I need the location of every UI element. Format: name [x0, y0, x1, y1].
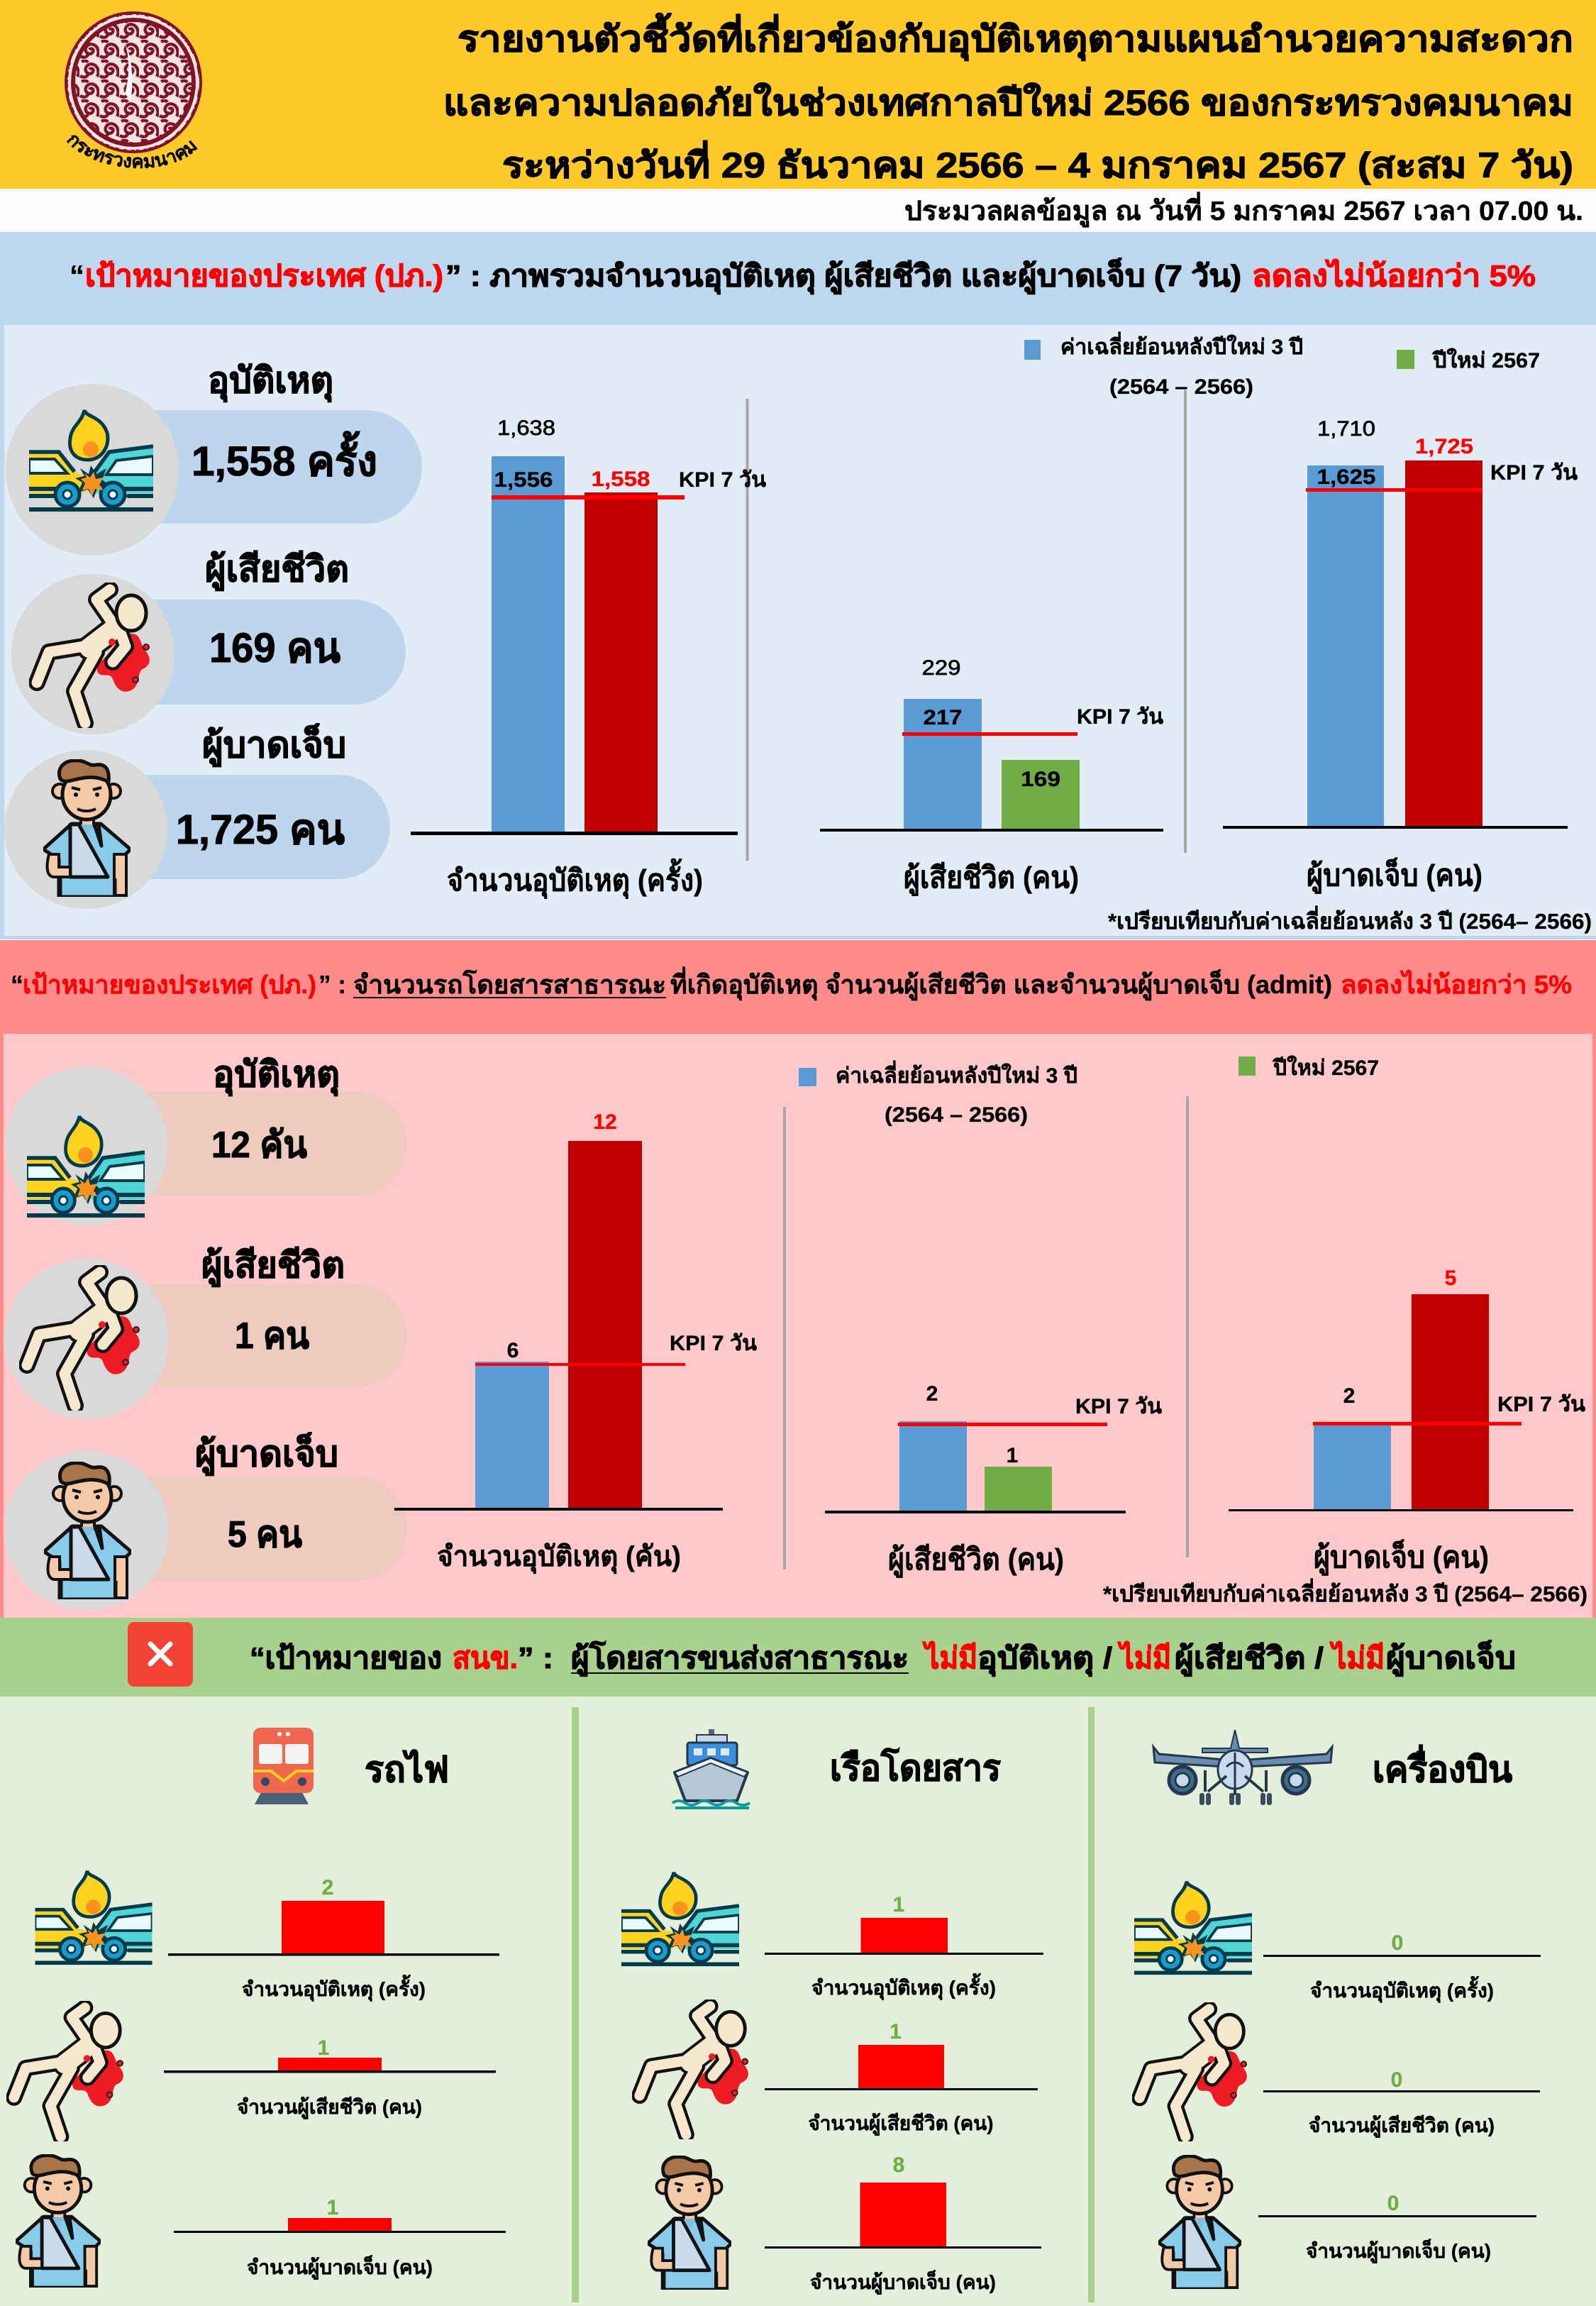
- chart: accident vehicles, section 2: 12: [593, 1110, 617, 1134]
- title: และความปลอดภัยในช่วงเทศกาลปีใหม่ 2566 ของกระทรวงคมนาคม: [443, 82, 1573, 123]
- section 1 heading: “: [70, 259, 84, 292]
- aviation injured row: จำนวนผู้บาดเจ็บ (คน): [1306, 2239, 1491, 2263]
- stat: injured: [4, 723, 390, 909]
- icon: airplane: [1153, 1730, 1332, 1805]
- section 2 heading: เป้าหมายของประเทศ (ปภ.): [23, 970, 316, 999]
- rail accidents row: จำนวนอุบัติเหตุ (ครั้ง): [242, 1974, 426, 2002]
- chart: deaths, section 1: ผู้เสียชีวิต (คน): [904, 861, 1079, 896]
- footnote: section 1: *เปรียบเทียบกับค่าเฉลี่ยย้อนหลัง 3 ปี (2564– 2566): [1108, 905, 1592, 934]
- chart: accidents, section 1: 1,558: [592, 468, 650, 491]
- panel: ferry: เรือโดยสาร: [830, 1747, 1001, 1788]
- aviation deaths row: 0: [1391, 2068, 1402, 2092]
- stat: deaths: ผู้เสียชีวิต: [205, 549, 349, 591]
- stat: accidents: อุบัติเหตุ: [213, 1054, 340, 1096]
- stat: injured: [4, 1432, 407, 1610]
- panel: public transport summary: [4, 1054, 407, 1610]
- icon: train: [253, 1728, 314, 1804]
- chart: accidents, section 1: 1,556: [494, 468, 553, 492]
- chart: injured, section 1: [1223, 417, 1578, 894]
- chart: deaths, section 1: 229: [922, 656, 960, 680]
- legend: section 2: ค่าเฉลี่ยย้อนหลังปีใหม่ 3 ปี: [836, 1060, 1077, 1088]
- section 3 heading: ไม่มี: [1117, 1640, 1171, 1675]
- legend: section 2: [799, 1055, 1379, 1127]
- section 1 heading: เป้าหมายของประเทศ (ปภ.): [85, 259, 443, 292]
- chart: injured, section 1: 1,625: [1317, 465, 1376, 489]
- section 2 heading: ลดลงไม่น้อยกว่า 5%: [1341, 969, 1572, 999]
- ferry accidents row: จำนวนอุบัติเหตุ (ครั้ง): [811, 1973, 996, 2000]
- section 3 heading: [0, 1618, 1596, 1697]
- panel: national overview summary: [4, 360, 422, 909]
- chart: deaths, section 2: 1: [1007, 1444, 1018, 1467]
- chart: injured, section 2: 2: [1343, 1384, 1355, 1408]
- icon: ship: [672, 1729, 750, 1808]
- rail deaths row: [14, 2008, 496, 2136]
- chart: accident vehicles, section 2: 6: [507, 1339, 519, 1362]
- ferry deaths row: [640, 2007, 1038, 2136]
- chart: accident vehicles, section 2: จำนวนอุบัติเหตุ (คัน): [437, 1541, 681, 1574]
- chart: accidents, section 1: KPI 7 วัน: [679, 468, 767, 492]
- chart: injured, section 2: 5: [1445, 1267, 1456, 1290]
- section 2 heading: จำนวนรถโดยสารสาธารณะ: [353, 969, 666, 999]
- chart: deaths, section 2: KPI 7 วัน: [1075, 1395, 1162, 1418]
- chart: accident vehicles, section 2: KPI 7 วัน: [670, 1332, 758, 1355]
- aviation deaths row: จำนวนผู้เสียชีวิต (คน): [1309, 2114, 1495, 2138]
- ferry deaths row: จำนวนผู้เสียชีวิต (คน): [809, 2112, 993, 2136]
- legend: section 1: ค่าเฉลี่ยย้อนหลังปีใหม่ 3 ปี: [1060, 331, 1303, 359]
- chart: deaths, section 2: 2: [926, 1382, 938, 1406]
- stat: injured: ผู้บาดเจ็บ: [202, 723, 346, 767]
- section 3 heading: สนข.: [453, 1641, 518, 1675]
- ferry accidents row: 1: [893, 1893, 904, 1916]
- stat: deaths: 169 คน: [209, 625, 340, 671]
- stat: deaths: [11, 549, 406, 734]
- stat: accidents: 1,558 ครั้ง: [192, 431, 377, 485]
- ferry injured row: 8: [893, 2153, 904, 2177]
- chart: injured, section 2: ผู้บาดเจ็บ (คน): [1314, 1539, 1489, 1576]
- panel: aviation: [1134, 1730, 1541, 2289]
- chart: injured, section 2: KPI 7 วัน: [1497, 1393, 1586, 1416]
- stat: injured: ผู้บาดเจ็บ: [195, 1432, 338, 1476]
- rail accidents row: [35, 1871, 499, 2002]
- chart: accident vehicles, section 2: [394, 1110, 758, 1574]
- panel: rail: [14, 1728, 506, 2288]
- chart: deaths, section 2: ผู้เสียชีวิต (คน): [888, 1543, 1064, 1578]
- ferry accidents row: [621, 1872, 1043, 2000]
- data processed date: ประมวลผลข้อมูล ณ วันที่ 5 มกราคม 2567 เวลา 07.00 น.: [904, 192, 1583, 228]
- aviation accidents row: [1134, 1882, 1541, 2003]
- legend: section 1: [1024, 331, 1540, 399]
- chart: deaths, section 1: 169: [1021, 768, 1060, 791]
- rail injured row: [16, 2156, 506, 2288]
- panel: rail: รถไฟ: [365, 1749, 449, 1789]
- section 1 heading: [0, 232, 1596, 325]
- aviation deaths row: [1139, 2009, 1540, 2138]
- section 2 heading: ที่เกิดอุบัติเหตุ จำนวนผู้เสียชีวิต และจำนวนผู้บาดเจ็บ (admit): [670, 966, 1332, 1001]
- chart: injured, section 1: 1,725: [1415, 435, 1473, 458]
- aviation injured row: 0: [1387, 2192, 1399, 2215]
- logo: ministry of transport seal: กระทรวงคมนาคม: [67, 135, 198, 169]
- chart: deaths, section 2: [825, 1382, 1162, 1578]
- ferry deaths row: 1: [890, 2020, 902, 2043]
- legend: section 1: (2564 – 2566): [1109, 375, 1253, 399]
- stat: deaths: [4, 1245, 407, 1419]
- section 2 heading: ” :: [318, 970, 346, 999]
- stat: accidents: 12 คัน: [211, 1125, 307, 1166]
- rail injured row: จำนวนผู้บาดเจ็บ (คน): [247, 2255, 433, 2280]
- header banner: [0, 0, 1596, 189]
- logo: ministry of transport seal: [65, 11, 202, 169]
- legend: section 2: (2564 – 2566): [885, 1103, 1028, 1127]
- rail deaths row: จำนวนผู้เสียชีวิต (คน): [237, 2096, 422, 2119]
- icon: red cross button: [128, 1622, 193, 1687]
- stat: accidents: [6, 360, 422, 556]
- stat: deaths: ผู้เสียชีวิต: [201, 1245, 345, 1287]
- ferry injured row: [648, 2153, 1041, 2295]
- chart: accidents, section 1: จำนวนอุบัติเหตุ (ครั้ง): [447, 858, 703, 899]
- section 3 heading: “เป้าหมายของ: [250, 1641, 442, 1675]
- chart: deaths, section 1: [820, 656, 1163, 896]
- stat: accidents: [5, 1054, 407, 1226]
- chart: deaths, section 1: KPI 7 วัน: [1077, 705, 1163, 729]
- section 3 heading: อุบัติเหตุ /: [977, 1641, 1112, 1677]
- section 1 heading: ลดลงไม่น้อยกว่า 5%: [1252, 258, 1536, 292]
- panel: ferry: [621, 1729, 1043, 2295]
- ferry injured row: จำนวนผู้บาดเจ็บ (คน): [810, 2270, 996, 2295]
- chart: injured, section 1: ผู้บาดเจ็บ (คน): [1307, 857, 1483, 894]
- section 3 heading: ผู้บาดเจ็บ: [1386, 1640, 1516, 1677]
- stat: injured: 1,725 คน: [176, 807, 345, 853]
- chart: deaths, section 1: 217: [924, 706, 962, 729]
- rail injured row: 1: [327, 2196, 338, 2219]
- chart: accidents, section 1: 1,638: [497, 416, 555, 440]
- stat: accidents: อุบัติเหตุ: [208, 360, 333, 402]
- section 3 heading: ” :: [518, 1641, 553, 1675]
- section 3 heading: ไม่มี: [922, 1640, 977, 1675]
- legend: section 2: ปีใหม่ 2567: [1272, 1055, 1379, 1080]
- section 3 heading: ผู้เสียชีวิต /: [1175, 1641, 1324, 1677]
- rail deaths row: 1: [318, 2036, 329, 2060]
- title: ระหว่างวันที่ 29 ธันวาคม 2566 – 4 มกราคม 2567 (สะสม 7 วัน): [502, 140, 1573, 185]
- section 1 heading: ” : ภาพรวมจำนวนอุบัติเหตุ ผู้เสียชีวิต และผู้บาดเจ็บ (7 วัน): [445, 258, 1241, 294]
- aviation accidents row: 0: [1392, 1931, 1403, 1955]
- legend: section 1: ปีใหม่ 2567: [1431, 348, 1540, 373]
- section 2 heading: [0, 940, 1596, 1034]
- chart: accidents, section 1: [411, 416, 767, 899]
- stat: deaths: 1 คน: [235, 1315, 309, 1357]
- section 3 heading: ผู้โดยสารขนส่งสาธารณะ: [571, 1640, 909, 1677]
- chart: injured, section 2: [1229, 1267, 1586, 1576]
- stat: injured: 5 คน: [228, 1514, 302, 1555]
- footnote: section 2: *เปรียบเทียบกับค่าเฉลี่ยย้อนหลัง 3 ปี (2564– 2566): [1103, 1578, 1587, 1606]
- section 3 heading: ไม่มี: [1329, 1640, 1385, 1675]
- rail accidents row: 2: [322, 1876, 333, 1899]
- aviation injured row: [1158, 2156, 1536, 2289]
- chart: injured, section 1: 1,710: [1317, 417, 1375, 441]
- aviation accidents row: จำนวนอุบัติเหตุ (ครั้ง): [1310, 1975, 1494, 2003]
- chart: injured, section 1: KPI 7 วัน: [1490, 461, 1578, 485]
- title: [443, 13, 1573, 185]
- panel: aviation: เครื่องบิน: [1373, 1745, 1512, 1789]
- title: รายงานตัวชี้วัดที่เกี่ยวข้องกับอุบัติเหตุตามแผนอำนวยความสะดวก: [458, 13, 1573, 61]
- section 2 heading: “: [11, 970, 23, 999]
